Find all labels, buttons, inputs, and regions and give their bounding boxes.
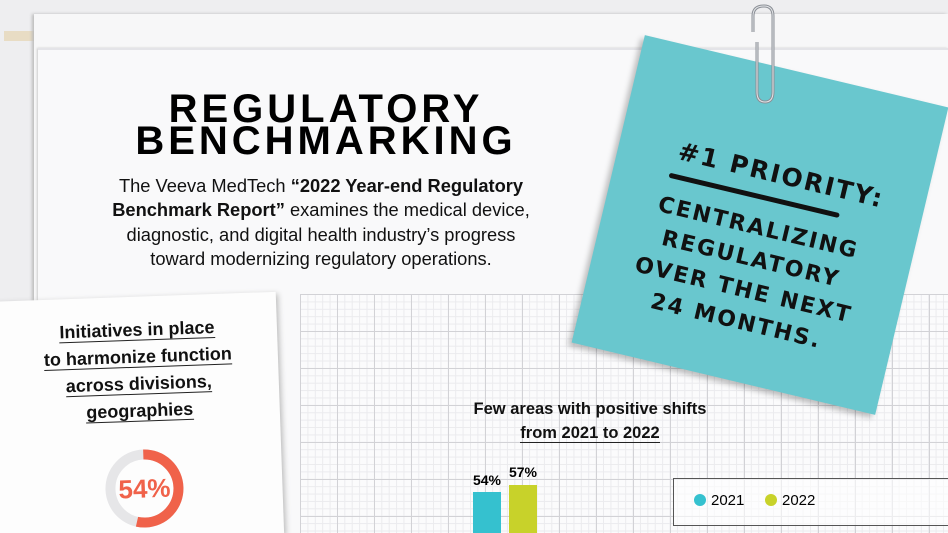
icon: paperclip — [752, 4, 774, 104]
title — [135, 87, 517, 163]
chart heading: Few areas with positive shifts — [474, 400, 706, 418]
title: BENCHMARKING — [135, 119, 517, 163]
underline stroke — [669, 173, 840, 218]
note body: OVER THE NEXT — [632, 253, 854, 328]
legend — [673, 478, 948, 526]
intro text — [112, 175, 530, 269]
intro text: toward modernizing regulatory operations. — [150, 248, 492, 269]
card heading: geographies — [86, 399, 194, 423]
legend: 2021 — [711, 492, 744, 509]
bar chart — [473, 464, 537, 533]
chart heading — [474, 400, 706, 443]
donut chart 54%: 54% — [118, 473, 171, 504]
bar 2021 — [473, 492, 501, 533]
bar chart: 57% — [509, 464, 537, 480]
tan strip — [4, 31, 38, 41]
note body: CENTRALIZING — [655, 192, 861, 264]
note heading: #1 PRIORITY: — [675, 137, 887, 214]
card heading: Initiatives in place — [59, 317, 215, 342]
card heading — [44, 317, 232, 424]
note body: 24 MONTHS. — [648, 289, 824, 354]
title: REGULATORY — [169, 87, 483, 131]
grid area — [300, 294, 948, 533]
intro text: Benchmark Report” examines the medical device, — [112, 199, 530, 220]
chart heading: from 2021 to 2022 — [520, 424, 660, 442]
note body: REGULATORY — [659, 226, 843, 293]
bar 2022 — [509, 485, 537, 533]
panel: harmonize initiatives card — [0, 292, 284, 533]
note body — [632, 192, 861, 354]
donut chart 54% — [106, 450, 184, 528]
intro text: The Veeva MedTech “2022 Year-end Regulatory — [119, 175, 523, 196]
sticky note — [572, 35, 948, 415]
legend: 2022 — [782, 492, 815, 509]
intro text: diagnostic, and digital health industry’s progress — [127, 224, 515, 245]
card heading: to harmonize function — [44, 343, 232, 370]
card heading: across divisions, — [65, 371, 212, 396]
bar chart: 54% — [473, 472, 501, 488]
